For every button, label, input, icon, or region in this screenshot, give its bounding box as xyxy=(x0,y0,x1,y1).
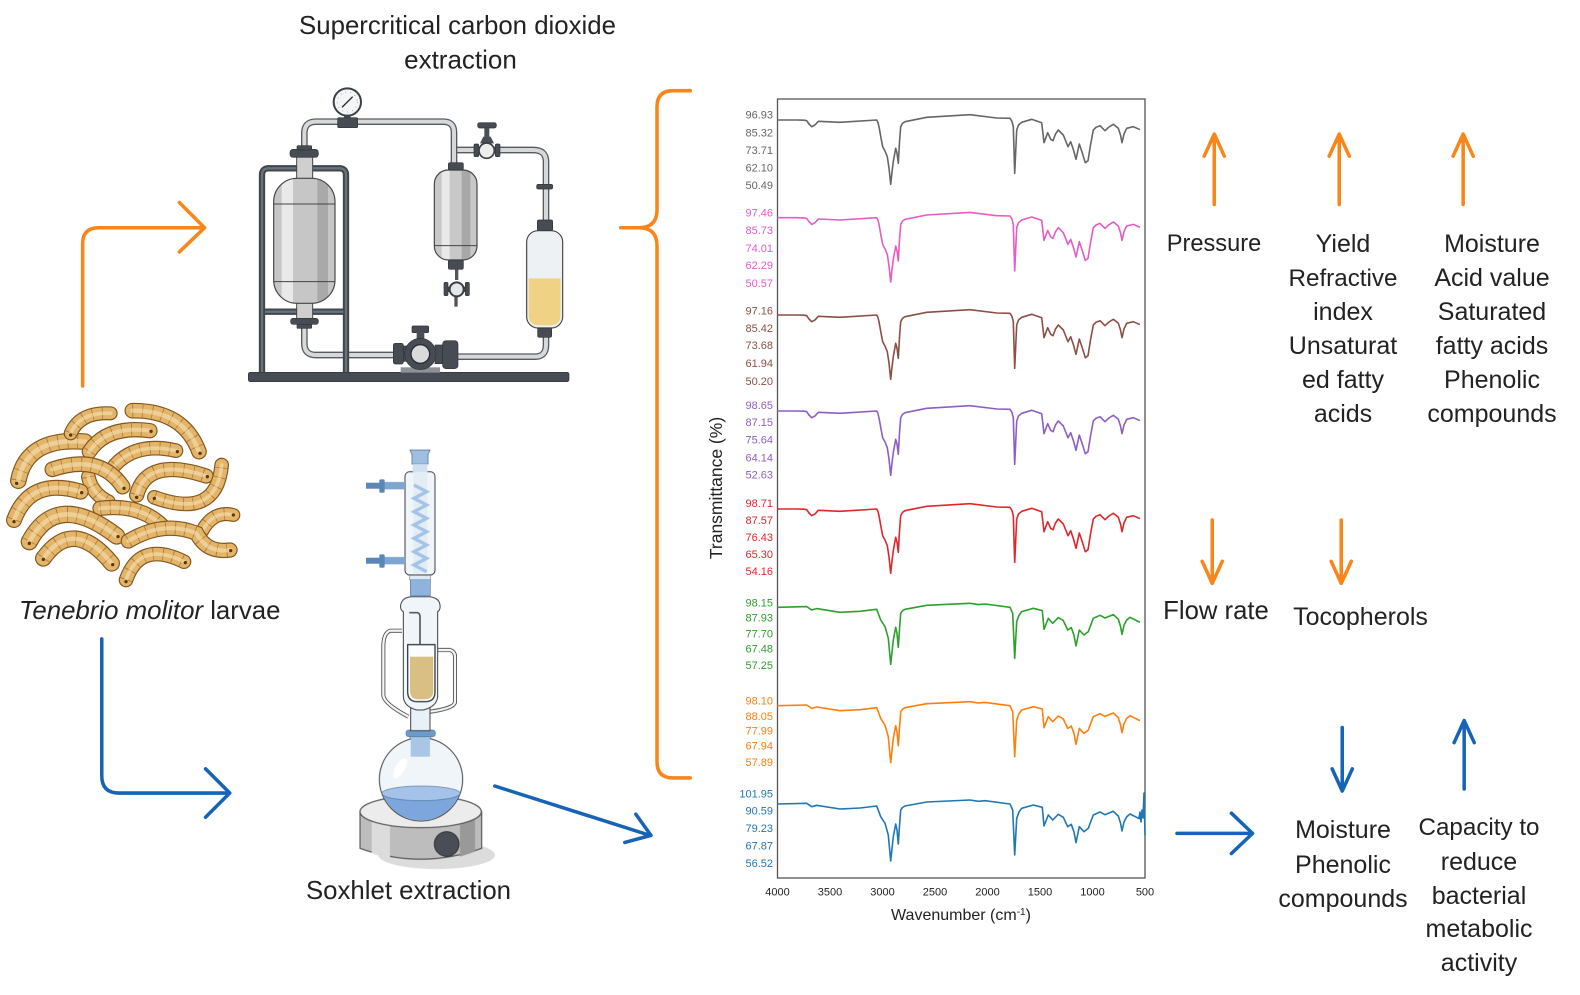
collector band xyxy=(537,184,553,189)
x axis tick labels: 500 xyxy=(1136,886,1154,898)
text: increased with pressure: index xyxy=(1313,298,1373,326)
text: Soxhlet increased: bacterial xyxy=(1432,882,1526,910)
spectrum green: 57.25 xyxy=(745,660,773,672)
condenser xyxy=(366,450,435,596)
spectrum blue: 101.95 xyxy=(739,788,773,800)
arrow: moisture group up xyxy=(1453,134,1473,205)
y axis title: Transmittance (%) xyxy=(706,417,726,559)
title: supercritical carbon dioxide extraction: extraction xyxy=(404,44,517,74)
label: Tenebrio molitor larvae: Tenebrio molitor larvae xyxy=(19,597,280,625)
arrow: tocopherols down xyxy=(1331,520,1351,583)
spectrum brown: 97.16 xyxy=(745,306,773,318)
spectrum purple: 98.65 xyxy=(745,400,773,412)
all flow arrows and bracket xyxy=(83,91,1474,854)
x axis tick labels: 2500 xyxy=(923,886,947,898)
base plate xyxy=(248,372,569,382)
spectrum gray: 62.10 xyxy=(745,162,773,174)
icon: supercritical CO2 extraction apparatus xyxy=(248,88,569,382)
spectrum red: 65.30 xyxy=(745,549,773,561)
arrow: Soxhlet to spectra xyxy=(495,786,651,842)
text: moisture group: Saturated xyxy=(1438,298,1546,326)
arrow: larvae to Soxhlet extraction xyxy=(102,639,230,817)
text: Soxhlet increased: reduce xyxy=(1441,848,1517,876)
x axis tick labels: 3500 xyxy=(818,886,842,898)
text: moisture group: compounds xyxy=(1427,400,1557,428)
spectrum gray xyxy=(745,110,1139,192)
title: supercritical carbon dioxide extraction: Supercritical carbon dioxide xyxy=(299,12,616,40)
pump xyxy=(393,326,458,373)
spectrum pink: 85.73 xyxy=(745,225,773,237)
text: moisture group: Moisture xyxy=(1444,230,1540,258)
label: pressure: Pressure xyxy=(1167,231,1261,257)
text: increased with pressure: acids xyxy=(1314,400,1372,428)
spectrum green: 87.93 xyxy=(745,613,773,625)
text: increased with pressure: ed fatty xyxy=(1302,366,1384,394)
spectrum green xyxy=(745,598,1139,672)
spectrum blue: 67.87 xyxy=(745,840,773,852)
spectrum brown: 61.94 xyxy=(745,358,773,370)
text: Soxhlet decreased xyxy=(1278,816,1408,913)
arrow: pressure up xyxy=(1204,134,1224,205)
round bottom flask xyxy=(379,730,463,823)
x axis tick labels: 2000 xyxy=(975,886,1000,898)
text: Soxhlet decreased: compounds xyxy=(1278,885,1408,913)
label: tocopherols: Tocopherols xyxy=(1293,603,1428,631)
spectrum green: 77.70 xyxy=(745,628,773,640)
separator vessel xyxy=(434,163,477,307)
spectrum orange: 98.10 xyxy=(745,696,773,708)
x axis tick labels xyxy=(765,886,1154,898)
text: Soxhlet increased: metabolic xyxy=(1426,915,1532,943)
spectrum pink: 97.46 xyxy=(745,208,773,220)
x axis title: ) xyxy=(1026,907,1031,924)
spectrum red: 76.43 xyxy=(745,532,773,544)
text: moisture group: Phenolic xyxy=(1444,366,1540,394)
spectrum orange: 67.94 xyxy=(745,741,773,753)
extractor chamber xyxy=(383,597,455,731)
spectrum gray: 85.32 xyxy=(745,128,773,140)
spectrum gray: 50.49 xyxy=(745,180,773,192)
spectrum brown: 73.68 xyxy=(745,340,773,352)
text: moisture group: Acid value xyxy=(1434,264,1550,292)
spectrum gray: 96.93 xyxy=(745,110,773,122)
text: Soxhlet increased: activity xyxy=(1441,949,1518,977)
arrow: flow rate down xyxy=(1202,520,1222,583)
spectrum purple: 52.63 xyxy=(745,470,773,482)
spectrum green: 98.15 xyxy=(745,598,773,610)
spectrum brown xyxy=(745,306,1139,388)
text: Soxhlet increased xyxy=(1418,814,1540,977)
text: increased with pressure xyxy=(1289,230,1397,428)
x axis tick labels: 1500 xyxy=(1028,886,1052,898)
text: moisture group xyxy=(1427,230,1557,428)
icon: Soxhlet extraction apparatus xyxy=(360,450,495,869)
spectrum purple: 87.15 xyxy=(745,417,773,429)
pipework xyxy=(304,122,546,357)
label: Soxhlet extraction: Soxhlet extraction xyxy=(306,877,511,905)
spectrum gray: 73.71 xyxy=(745,145,773,157)
spectrum pink: 62.29 xyxy=(745,260,773,272)
spectrum brown: 50.20 xyxy=(745,376,773,388)
spectrum blue xyxy=(739,788,1145,870)
x axis tick labels: 4000 xyxy=(765,886,790,898)
x axis tick labels: 3000 xyxy=(870,886,895,898)
label: flow rate: Flow rate xyxy=(1163,597,1269,625)
spectrum pink: 50.57 xyxy=(745,278,773,290)
bracket: supercritical samples xyxy=(621,91,690,778)
spectrum orange: 88.05 xyxy=(745,711,773,723)
arrow: bacterial capacity up xyxy=(1454,720,1474,789)
x axis tick labels: 1000 xyxy=(1080,886,1105,898)
collection vessel with oil xyxy=(527,220,563,337)
icon: mealworm larvae cluster xyxy=(12,411,235,583)
arrow: larvae to supercritical extraction xyxy=(83,203,205,386)
spectrum red: 98.71 xyxy=(745,498,773,510)
text: moisture group: fatty acids xyxy=(1436,332,1548,360)
x axis title: Wavenumber (cm xyxy=(891,907,1017,924)
spectrum red: 54.16 xyxy=(745,566,773,578)
spectrum purple: 75.64 xyxy=(745,434,773,446)
support frame xyxy=(262,168,346,372)
pressure gauge xyxy=(334,88,361,128)
spectrum green: 67.48 xyxy=(745,644,773,656)
spectrum brown: 85.42 xyxy=(745,323,773,335)
title: supercritical carbon dioxide extraction xyxy=(299,12,616,74)
spectrum orange xyxy=(745,696,1139,769)
spectrum blue: 56.52 xyxy=(745,858,773,870)
text: increased with pressure: Yield xyxy=(1316,230,1370,258)
text: Soxhlet increased: Capacity to xyxy=(1418,814,1540,841)
spectrum orange: 77.99 xyxy=(745,726,773,738)
spectrum purple: 64.14 xyxy=(745,452,773,464)
spectrum pink: 74.01 xyxy=(745,243,773,255)
hot plate xyxy=(360,796,495,869)
text: increased with pressure: Refractive xyxy=(1289,265,1397,292)
spectrum orange: 57.89 xyxy=(745,757,773,769)
spectrum red: 87.57 xyxy=(745,515,773,527)
plot frame xyxy=(778,99,1145,878)
spectrum red xyxy=(745,498,1139,578)
spectrum blue: 79.23 xyxy=(745,823,773,835)
arrow: moisture and phenolics down xyxy=(1332,728,1352,791)
thimble with sample xyxy=(408,645,435,702)
large extraction vessel xyxy=(274,146,335,328)
text: increased with pressure: Unsaturat xyxy=(1289,332,1397,360)
arrow: Soxhlet result xyxy=(1177,813,1253,854)
needle valve xyxy=(474,123,500,158)
chart: FTIR spectra xyxy=(706,99,1154,924)
spectrum purple xyxy=(745,400,1139,482)
text: Soxhlet decreased: Moisture xyxy=(1295,816,1391,844)
text: Soxhlet decreased: Phenolic xyxy=(1295,851,1391,879)
arrow: yield group up xyxy=(1329,134,1349,205)
x axis title: -1 xyxy=(1017,907,1026,918)
spectrum pink xyxy=(745,208,1139,290)
larva heads xyxy=(12,430,235,583)
spectrum blue: 90.59 xyxy=(745,806,773,818)
